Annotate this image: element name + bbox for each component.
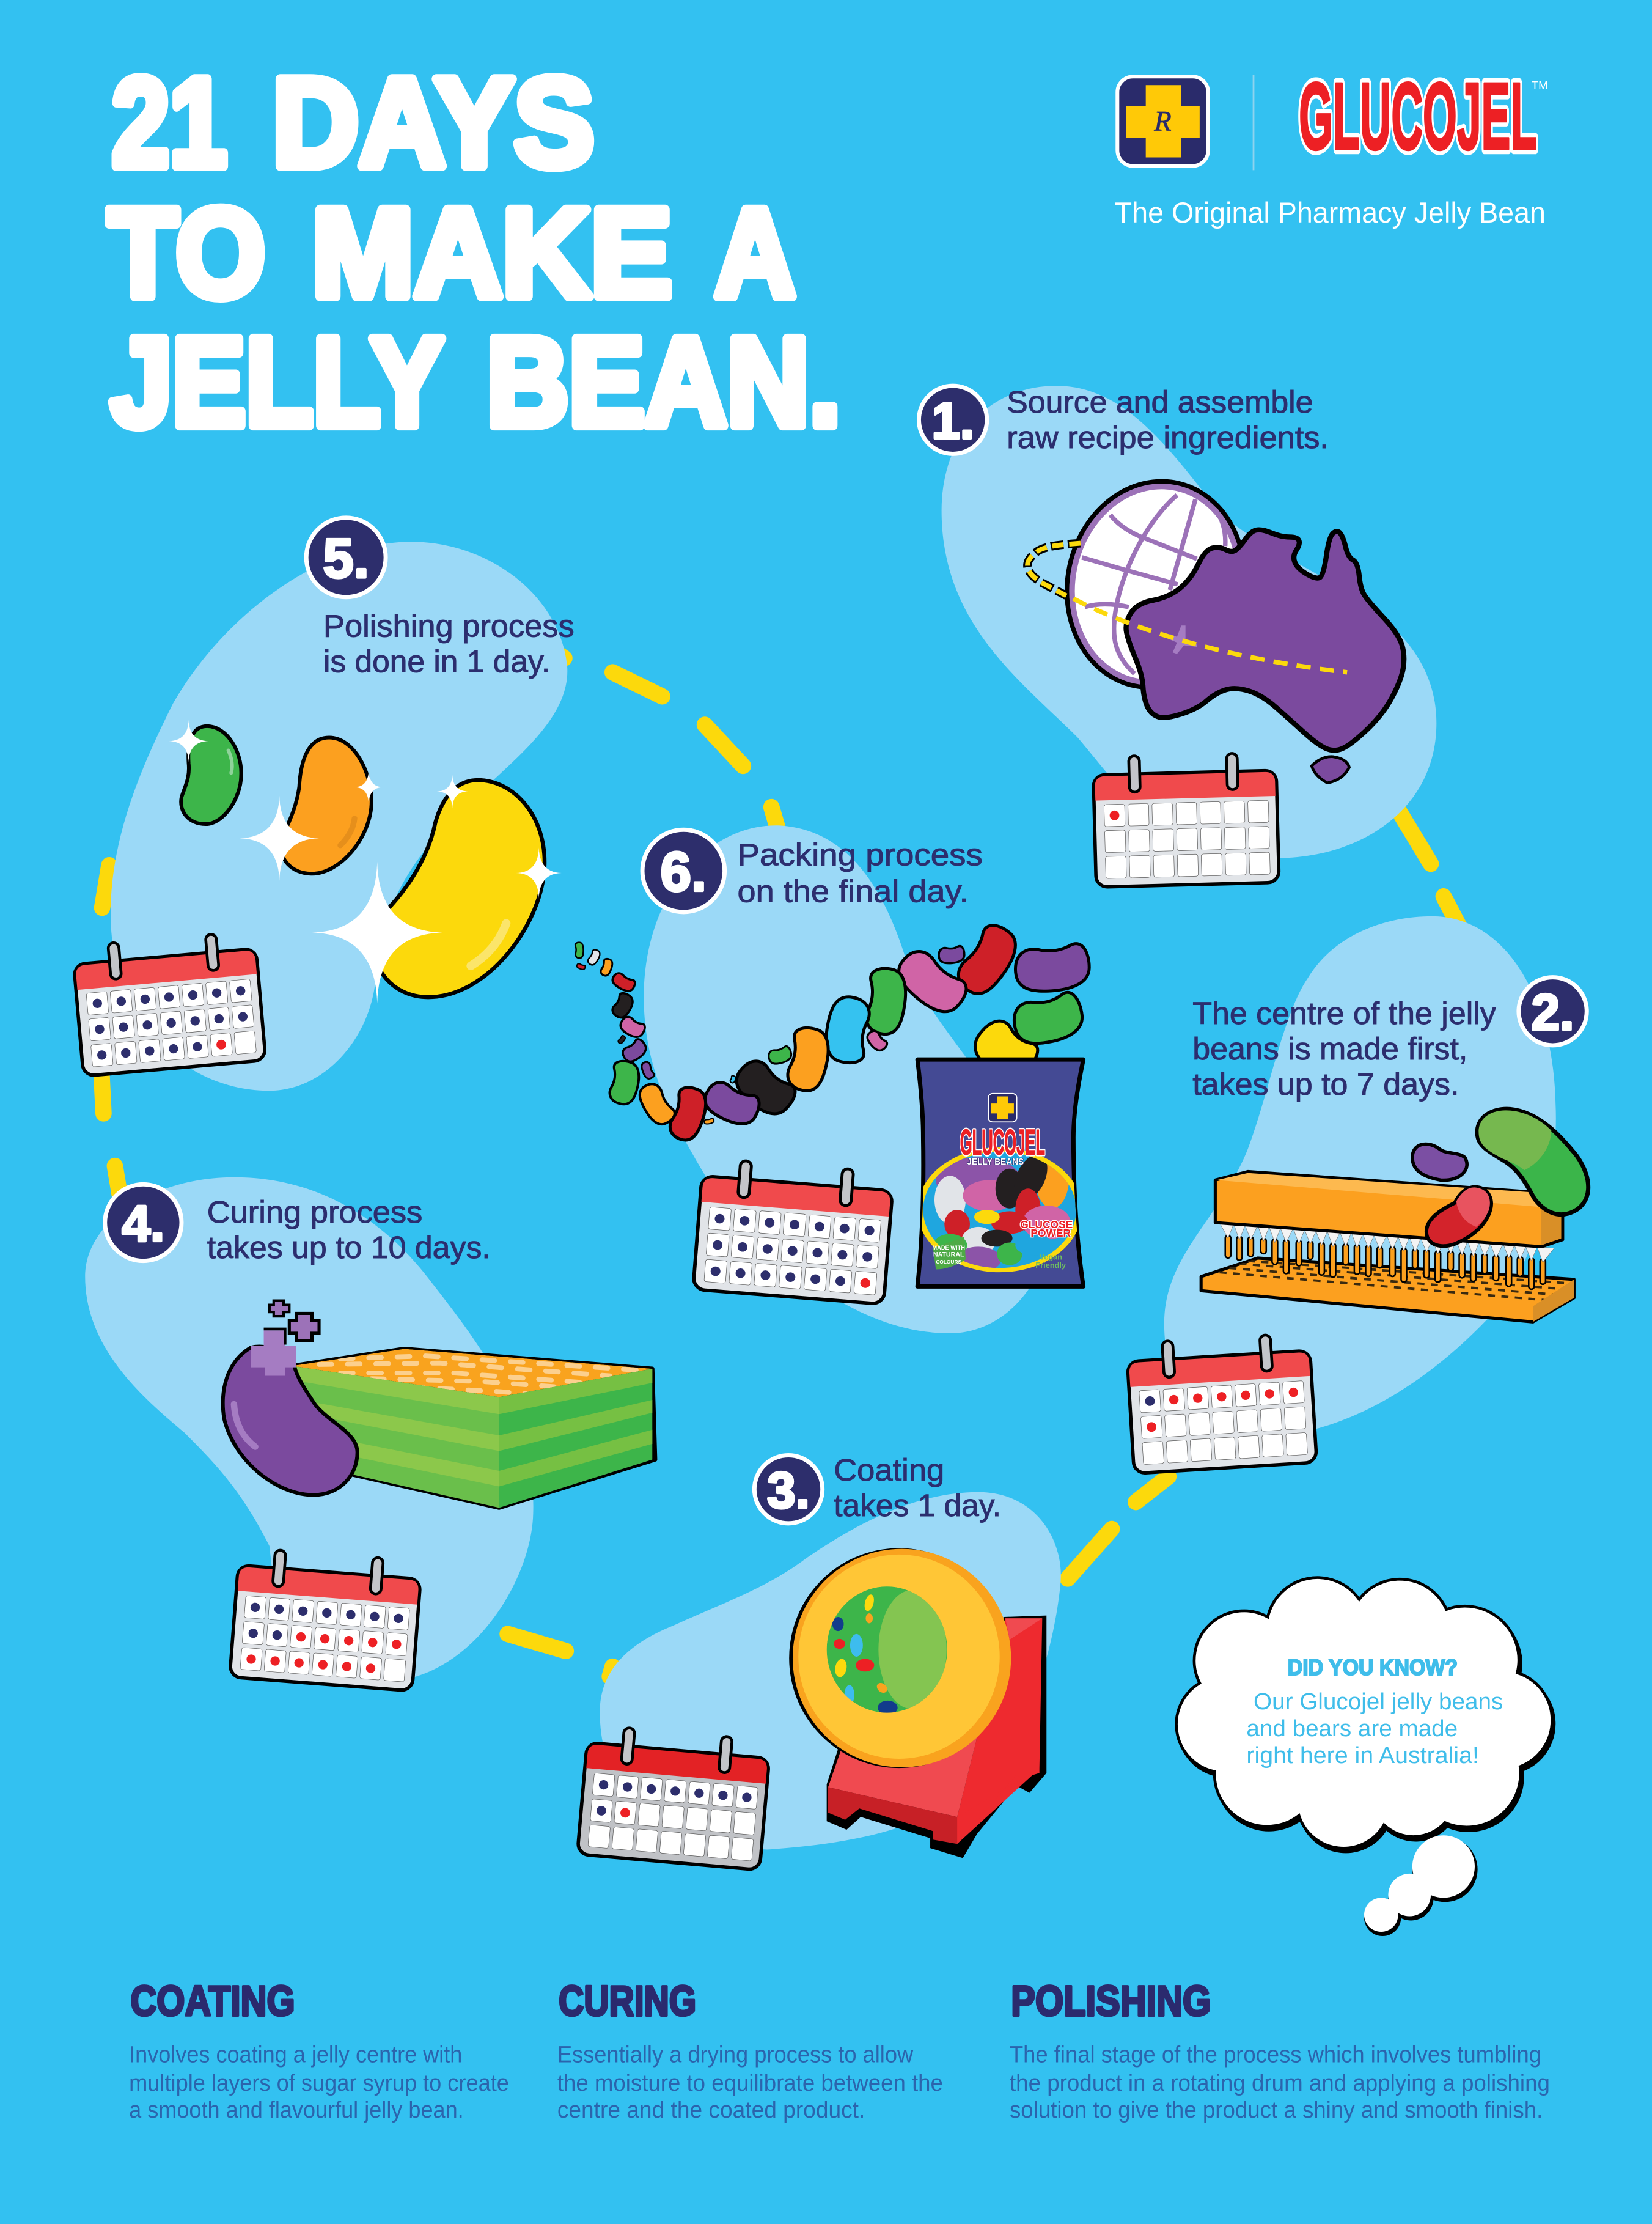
panel: step 2 blob [1164, 916, 1556, 1435]
step 6 badge: 6. [661, 841, 707, 903]
definition: coating: Involves coating a jelly centre with [129, 2042, 462, 2068]
step 2 badge [1519, 978, 1587, 1045]
bag logo [960, 1094, 1045, 1167]
step 5 text [323, 609, 575, 679]
illustration: polished beans [169, 720, 562, 1004]
callout: did you know thought cloud [1177, 1578, 1554, 1936]
calendar: step 5 [73, 936, 266, 1076]
definition: polishing: the product in a rotating drum and applying a polishing [1010, 2070, 1550, 2096]
bean: purple [1412, 1144, 1467, 1180]
step 4 badge: 4. [122, 1195, 164, 1252]
title [108, 51, 841, 452]
sparkles [169, 720, 562, 1004]
tagline: The Original Pharmacy Jelly Bean [1115, 197, 1546, 229]
title: BEAN. [486, 311, 841, 452]
calendar: step 1 [1093, 757, 1279, 887]
step 5 text: is done in 1 day. [323, 644, 550, 679]
title: TO [108, 182, 265, 323]
step 2 text: takes up to 7 days. [1192, 1067, 1459, 1102]
tray right face [499, 1369, 652, 1508]
step 3 badge: 3. [767, 1461, 810, 1519]
bag badges: Vegan [1039, 1252, 1062, 1261]
definition: coating: a smooth and flavourful jelly bean. [129, 2097, 464, 2123]
calendar: step 6 [693, 1163, 894, 1304]
definition: curing: Essentially a drying process to allow [557, 2042, 914, 2068]
bag badges: GLUCOSE [1020, 1218, 1073, 1231]
panel: step 1 blob [942, 386, 1436, 858]
cloud text: right here in Australia! [1246, 1742, 1479, 1769]
definition: polishing: POLISHING [1011, 1977, 1211, 2025]
illustration: depositor machine [1201, 1109, 1588, 1322]
plane [1167, 625, 1197, 654]
step 1 badge: 1. [931, 392, 974, 449]
cloud text [1246, 1688, 1503, 1769]
title: JELLY [111, 311, 444, 452]
step 5 text: Polishing process [323, 609, 575, 644]
cloud text: Our Glucojel jelly beans [1254, 1688, 1503, 1715]
flight route [1027, 543, 1081, 595]
logo: pharmacy cross: R [1153, 106, 1172, 137]
logo: Glucojel wordmark: TM [1532, 79, 1548, 92]
bag badges: POWER [1030, 1227, 1071, 1239]
definition: coating: multiple layers of sugar syrup to create [129, 2070, 509, 2096]
bean: green [181, 726, 241, 824]
machine drips [1228, 1238, 1543, 1286]
step 6 text: on the final day. [737, 874, 969, 909]
illustration: coating drum [790, 1549, 1046, 1858]
bean: red [1426, 1187, 1491, 1246]
step 1 text [1007, 385, 1329, 455]
calendar: step 4 [230, 1552, 422, 1691]
drum wheel [790, 1549, 1008, 1767]
step 1 text: Source and assemble [1007, 385, 1313, 419]
icon: globe and Australia [1027, 465, 1404, 783]
title: MAKE [312, 182, 672, 323]
step 4 text: takes up to 10 days. [207, 1230, 491, 1265]
step 2 text [1192, 996, 1496, 1102]
bean: yellow [373, 780, 545, 997]
definition: polishing: solution to give the product a shiny and smooth finish. [1010, 2097, 1543, 2123]
step 6 text [737, 837, 983, 909]
definition: curing [557, 1977, 943, 2123]
bag badges [932, 1218, 1073, 1270]
machine teeth [1219, 1223, 1554, 1262]
title: DAYS [272, 51, 594, 193]
thought bubbles [1364, 1835, 1478, 1936]
bag badges: NATURAL [933, 1251, 964, 1259]
panel: step 5 blob [111, 542, 567, 1091]
definition: curing: CURING [559, 1977, 696, 2025]
panel: step 4 blob [85, 1177, 534, 1678]
machine bar [1215, 1171, 1563, 1246]
step 2 text: The centre of the jelly [1192, 996, 1496, 1031]
drum window [827, 1586, 947, 1715]
step 2 badge: 2. [1532, 983, 1574, 1040]
drum stand [827, 1616, 1046, 1858]
cloud text: and bears are made [1246, 1715, 1458, 1742]
step 5 badge [306, 518, 386, 597]
step 6 text: Packing process [737, 837, 983, 872]
logo divider [1253, 75, 1254, 170]
bean: green [1477, 1109, 1588, 1215]
tray top [292, 1349, 652, 1397]
logo: pharmacy cross [1117, 76, 1208, 166]
step 3 badge [754, 1455, 823, 1523]
title: 21 [112, 51, 227, 193]
step 3 text [834, 1453, 1001, 1523]
bag bean collage [917, 1146, 1082, 1272]
machine plate [1201, 1258, 1574, 1322]
step 4 text: Curing process [207, 1195, 422, 1229]
definition: polishing: The final stage of the process which involves tumbling [1010, 2042, 1541, 2068]
step 5 badge: 5. [323, 528, 369, 589]
bag badges: MADE WITH [932, 1245, 965, 1251]
step 3 text: Coating [834, 1453, 944, 1487]
cloud shape [1177, 1578, 1554, 1852]
illustration: jelly bean bag: GLUCOJEL [960, 1123, 1045, 1163]
Tasmania [1312, 757, 1349, 783]
panel: step 6 blob [644, 825, 1051, 1333]
tray left face [292, 1366, 499, 1508]
step 2 text: beans is made first, [1192, 1031, 1467, 1066]
calendar: step 3 [578, 1730, 771, 1870]
panel: step 3 blob [600, 1492, 1061, 1849]
step 4 badge [105, 1184, 182, 1261]
bag badges: Friendly [1035, 1261, 1066, 1270]
definition: coating [129, 1977, 509, 2123]
step 4 text [207, 1195, 491, 1265]
step 1 text: raw recipe ingredients. [1007, 420, 1329, 455]
illustration: ribbon of beans [575, 920, 1091, 1144]
bean: purple with crosses [223, 1347, 358, 1495]
definition: coating: COATING [130, 1977, 295, 2025]
bag logo: JELLY BEANS [967, 1157, 1024, 1167]
step 6 badge [642, 830, 725, 912]
title: A [714, 182, 796, 323]
dashed yellow process path [99, 655, 1461, 1676]
globe [1048, 465, 1263, 704]
step 3 text: takes 1 day. [834, 1488, 1001, 1523]
illustration: jelly bean bag: GLUCOJEL [960, 1123, 1045, 1163]
definition: polishing [1010, 1977, 1550, 2123]
definition: curing: centre and the coated product. [557, 2097, 865, 2123]
Australia [1126, 530, 1404, 750]
calendar: step 2 [1126, 1338, 1316, 1473]
definition: curing: the moisture to equilibrate between the [557, 2070, 943, 2096]
illustration: curing tray [223, 1301, 655, 1508]
bag badges: COLOURS [936, 1259, 961, 1265]
cloud heading: DID YOU KNOW? [1288, 1654, 1458, 1680]
bean: orange [281, 737, 372, 874]
illustration: jelly bean bag [917, 1059, 1084, 1286]
step 1 badge [919, 386, 987, 454]
